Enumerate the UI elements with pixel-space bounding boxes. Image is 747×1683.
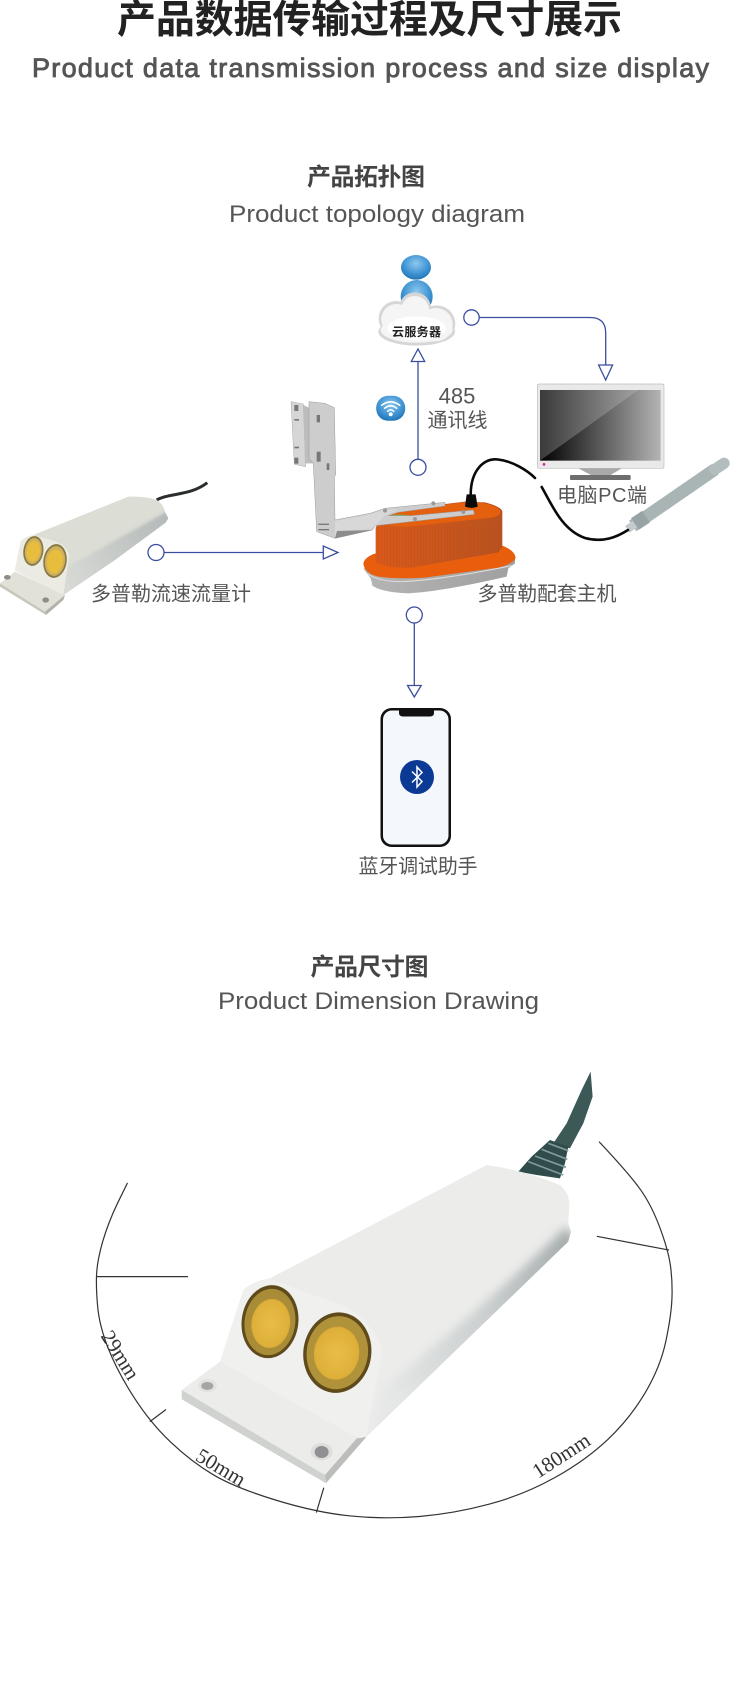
bluetooth badge [400, 760, 434, 794]
subtitle: Product data transmission process and size display [32, 53, 710, 83]
label: 485: 485 [439, 384, 475, 408]
icon: flowmeter [0, 483, 207, 615]
dimension arc and ticks [96, 1142, 672, 1518]
arrow: cloud to PC [464, 310, 613, 380]
label: 180mm: 180mm [528, 1428, 595, 1483]
cable [553, 1072, 593, 1148]
label: bluetooth assistant: 蓝牙调试助手 [358, 855, 478, 878]
subheading: dimensions: Product Dimension Drawing [218, 988, 539, 1015]
icon: cloud server with user [378, 255, 455, 346]
arrow: host to phone [406, 607, 422, 697]
sensor photo [182, 1072, 593, 1483]
orange body [376, 502, 502, 568]
subheading: topology: Product topology diagram [229, 201, 525, 228]
icon: PC monitor [537, 384, 664, 480]
icon: cable [471, 459, 628, 540]
label: 29mm: 29mm [96, 1326, 145, 1384]
user [401, 255, 433, 313]
base plate [0, 572, 65, 612]
arrow: host to cloud [410, 349, 426, 475]
title: 产品数据传输过程及尺寸展示 [117, 0, 622, 42]
base plate [182, 1362, 367, 1475]
label: flowmeter: 多普勒流速流量计 [91, 582, 251, 606]
bracket [291, 402, 306, 467]
icon: smartphone with bluetooth [380, 708, 451, 847]
label: communication line: 通讯线 [428, 409, 488, 432]
arrow: flowmeter to host [148, 544, 338, 560]
cloud label: 云服务器 [392, 324, 441, 339]
connector [465, 494, 478, 508]
label: 50mm: 50mm [192, 1443, 250, 1492]
label: host: 多普勒配套主机 [478, 582, 616, 606]
cable [157, 483, 207, 500]
lenses [237, 1281, 303, 1362]
label: PC: 电脑PC端 [557, 484, 647, 507]
icon: wifi [376, 396, 405, 421]
orange flange [363, 544, 516, 578]
grey base [363, 555, 515, 593]
heading: topology: 产品拓扑图 [307, 164, 425, 191]
cloud [378, 292, 455, 346]
icon: host device with bracket [291, 402, 516, 593]
dimension drawing [96, 1072, 672, 1518]
heading: dimensions: 产品尺寸图 [310, 954, 428, 981]
lenses [21, 535, 45, 567]
antenna [627, 463, 724, 529]
sensor housing [220, 1165, 571, 1438]
body [15, 497, 168, 595]
